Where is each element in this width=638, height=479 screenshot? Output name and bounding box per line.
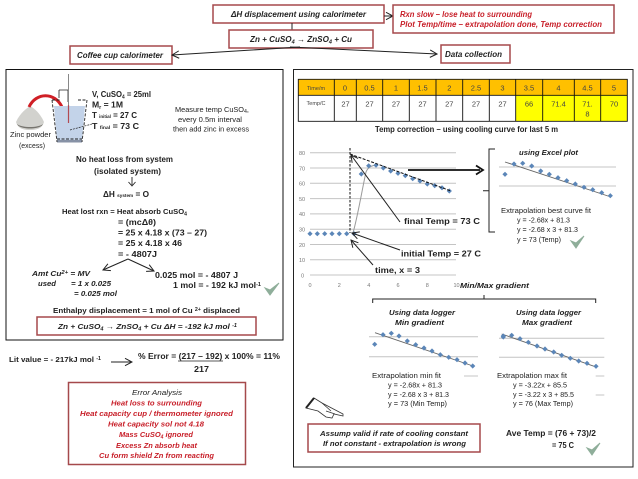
text: amount of copper: = 0.025 mol [74, 291, 118, 298]
text: amount of copper: = MV [68, 271, 92, 278]
chart: temperature vs time with cooling curve: 50 [299, 197, 305, 203]
text: quantities: r [99, 105, 101, 111]
heading: min gradient [389, 308, 456, 327]
table: time and temperature: 0.5 [364, 84, 375, 92]
table: time and temperature: 71.4 [551, 100, 566, 108]
table: time and temperature: 70 [610, 100, 618, 108]
chart: temperature vs time with cooling curve: 60 [299, 182, 305, 188]
arrow: initial temp [352, 233, 400, 250]
chart: temperature vs time with cooling curve: 0 [308, 283, 312, 289]
heading: max gradient: Max gradient [522, 318, 573, 327]
box: assumption [308, 424, 480, 452]
box: error analysis: Excess Zn absorb heat [116, 441, 197, 450]
text: heat calculation [62, 207, 207, 259]
chart: temperature vs time with cooling curve: 8 [426, 283, 429, 289]
text: heat calculation: = (mcΔθ) [118, 218, 156, 227]
text: amount of copper: = 1 x 0.025 [71, 281, 111, 288]
text: average temperature: Ave Temp = (76 + 73)/2 [506, 429, 597, 438]
text: measure temperature note: , [247, 107, 249, 114]
arrow: to data collection [290, 47, 437, 54]
table: time and temperature: 27 [498, 100, 507, 108]
text: Excel fit equations: y = -2.68 x 3 + 81.3 [517, 227, 578, 234]
box: enthalpy result: 4 [99, 326, 104, 332]
label: zinc powder [10, 132, 52, 150]
text: quantities: = 25ml [125, 90, 151, 99]
box: reaction equation: + Cu [332, 35, 352, 44]
text: amount of copper: Amt Cu [32, 271, 57, 278]
chart: max gradient fit [499, 334, 604, 395]
text: quantities: V, CuSO [92, 90, 123, 99]
box: error analysis: Error Analysis [132, 388, 182, 397]
text: heat calculation: Heat lost rxn = Heat absorb CuSO [62, 207, 182, 216]
label: zinc powder: (excess) [19, 143, 45, 150]
label: zinc powder: Zinc powder [10, 132, 52, 139]
text: heat calculation: = 25 x 4.18 x (73 – 27) [118, 228, 207, 238]
arrow: big arrow to Excel plot [408, 166, 483, 174]
text: average temperature: = 75 C [552, 441, 574, 450]
table: time and temperature: 4 [556, 84, 561, 92]
table: time and temperature [298, 79, 627, 121]
box: conditions [393, 5, 614, 33]
box: enthalpy result: Zn + CuSO [58, 322, 97, 331]
bracket: Excel plot [483, 149, 495, 232]
chart: min gradient fit [369, 333, 478, 376]
table: time and temperature: 8 [585, 110, 590, 118]
box: assumption: Assump valid if rate of cooling constant [319, 429, 469, 438]
box: enthalpy result [37, 317, 256, 335]
text: Excel fit equations: y = 73 (Temp) [517, 237, 561, 244]
icon: check mark [587, 443, 600, 455]
table: time and temperature: 27 [341, 100, 350, 108]
label: final temp: final Temp = 73 C [404, 217, 480, 226]
box: error analysis: Heat capacity cup / thermometer ignored [80, 409, 233, 418]
text: literature value: -1 [96, 356, 101, 362]
text: enthalpy definition: 2+ [195, 307, 201, 313]
text: enthalpy definition: Enthalpy displacement = 1 mol of Cu [53, 306, 184, 315]
chart: temperature vs time with cooling curve: 30 [299, 228, 305, 234]
icon: beaker with thermometer [52, 74, 92, 142]
box: reaction equation: Zn + CuSO [250, 35, 291, 44]
box: conditions: Plot Temp/time – extrapolation done, Temp correction [400, 20, 602, 29]
chart: temperature vs time with cooling curve: 10 [454, 283, 460, 289]
text: max fit equations [497, 373, 574, 408]
chart: temperature vs time with cooling curve: 2 [338, 283, 341, 289]
text: percent error [138, 352, 280, 374]
text: per mole enthalpy: 0.025 mol = - 4807 J [155, 271, 238, 280]
text: measure temperature note: every 0.5m interval [178, 117, 242, 124]
icon: zinc powder pile [16, 106, 44, 130]
chart: temperature vs time with cooling curve: 0 [301, 273, 304, 279]
text: measure temperature note: then add zinc in excess [173, 126, 250, 134]
box: enthalpy result: → ZnSO [103, 322, 138, 331]
text: percent error: 217 [194, 365, 210, 374]
arrow: time [351, 240, 373, 265]
text: quantities: 4 [122, 94, 125, 100]
text: measure temperature note: Measure temp CuSO [175, 107, 241, 114]
box: error analysis: 4 [160, 434, 164, 440]
text: per mole enthalpy [155, 271, 261, 290]
heading: min/max gradient: Min/Max gradient [460, 281, 530, 290]
table: time and temperature: 1 [394, 84, 398, 92]
text: enthalpy definition: displaced [201, 306, 240, 315]
text: min fit equations: y = -2.68 x 3 + 81.3 [388, 392, 449, 399]
text: max fit equations: Extrapolation max fit [497, 373, 567, 380]
text: literature value: Lit value = - 217kJ mol [9, 355, 89, 364]
icon: red arrow adding zinc [29, 96, 62, 107]
table: time and temperature: 71. [582, 100, 593, 108]
text: quantities: T initial = 27 C [92, 111, 137, 120]
text: min fit equations [372, 373, 449, 408]
text: quantities: T final = 73 C [92, 122, 139, 131]
chart: temperature vs time with cooling curve: 40 [299, 212, 305, 218]
heading: min gradient: Min gradient [395, 318, 445, 327]
text: heat calculation: = - 4807J [118, 250, 157, 259]
text: min fit equations: y = -2.68x + 81.3 [388, 382, 442, 390]
text: isolated system [76, 155, 173, 199]
table: time and temperature: 27 [472, 100, 480, 108]
text: max fit equations: y = -3.22x + 85.5 [513, 382, 567, 390]
table: time and temperature: 27 [418, 100, 427, 108]
box: enthalpy result: + Cu ΔH = -192 kJ mol [141, 322, 232, 331]
arrow: split right [128, 259, 154, 271]
heading: max gradient [516, 308, 582, 327]
bracket: min and max [373, 295, 596, 303]
panel: coffee cup calorimeter working [6, 70, 283, 340]
chart: temperature vs time with cooling curve: 20 [299, 243, 305, 249]
text: measure temperature note [173, 107, 250, 134]
text: min fit equations: Extrapolation min fit [372, 373, 441, 380]
box: error analysis: Heat capacity sol not 4.18 [108, 420, 205, 428]
arrow: to coffee cup [172, 47, 300, 55]
panel: data collection and temperature correction [294, 70, 633, 467]
text: isolated system: No heat loss from system [76, 155, 173, 164]
table: time and temperature: 5 [612, 84, 616, 92]
table: time and temperature: 27 [365, 100, 374, 108]
chart: Excel best fit [499, 162, 616, 197]
box: reaction equation: 4 [291, 40, 295, 46]
text: isolated system: (isolated system) [94, 167, 161, 176]
text: Excel fit equations: Extrapolation best curve fit [501, 208, 591, 215]
table: time and temperature: 27 [445, 100, 453, 108]
box: delta H displacement: ΔH displacement using calorimeter [230, 10, 367, 19]
arrow: to conditions box [384, 15, 393, 17]
arrow: final temp [351, 155, 400, 222]
text: amount of copper [31, 270, 118, 298]
box: enthalpy result: -1 [232, 323, 237, 329]
text: percent error: % Error = (217 – 192) x 100% = 11% [138, 352, 280, 361]
table: time and temperature: 2 [447, 84, 451, 92]
icon: pointing hand [306, 398, 343, 418]
box: error analysis: ignored [163, 430, 193, 439]
arrow: to reaction equation [291, 23, 293, 37]
text: quantities [92, 90, 151, 131]
chart: temperature vs time with cooling curve [299, 148, 460, 289]
heading: min gradient: Using data logger [389, 308, 456, 317]
text: max fit equations: y = 76 (Max Temp) [513, 401, 573, 408]
icon: check mark [571, 236, 584, 248]
text: measure temperature note: 4 [244, 109, 247, 115]
arrow: to percent error [111, 361, 132, 363]
text: isolated system: ΔH system = O [103, 190, 149, 199]
table: time and temperature: Temp/C [307, 101, 326, 107]
text: heat calculation: 4 [184, 212, 187, 218]
heading: temp correction: Temp correction – using cooling curve for last 5 m [375, 125, 558, 134]
text: per mole enthalpy: -1 [256, 282, 261, 288]
box: data collection: Data collection [445, 50, 502, 59]
table: time and temperature: 66 [525, 100, 533, 108]
box: reaction equation: 4 [328, 40, 332, 46]
table: time and temperature: Time/m [307, 86, 325, 92]
box: coffee cup calorimeter [70, 46, 172, 64]
text: max fit equations: y = -3.22 x 3 + 85.5 [513, 392, 574, 399]
heading: max gradient: Using data logger [516, 308, 582, 317]
label: time: time, x = 3 [375, 266, 421, 275]
text: Excel fit equations: y = -2.68x + 81.3 [517, 218, 570, 224]
box: data collection [441, 45, 510, 63]
text: average temperature [506, 429, 597, 450]
box: conditions: Rxn slow – lose heat to surrounding [400, 10, 532, 19]
chart: temperature vs time with cooling curve: 6 [396, 283, 400, 289]
table: time and temperature: 4.5 [582, 84, 593, 92]
box: error analysis: Cu form shield Zn from reacting [99, 451, 214, 460]
box: coffee cup calorimeter: Coffee cup calorimeter [77, 51, 164, 60]
text: quantities: M [92, 100, 99, 110]
chart: temperature vs time with cooling curve: 80 [299, 151, 305, 157]
table: time and temperature: 1.5 [417, 84, 428, 92]
arrow: split left [103, 259, 128, 270]
box: delta H displacement [213, 5, 384, 23]
heading: using Excel plot: using Excel plot [519, 148, 579, 157]
table: time and temperature: 2.5 [471, 84, 481, 92]
table: time and temperature: 3.5 [524, 84, 534, 92]
text: min fit equations: y = 73 (Min Temp) [388, 401, 447, 408]
box: error analysis [68, 382, 246, 464]
text: Excel fit equations [501, 208, 591, 244]
box: error analysis: Mass CuSO [119, 430, 161, 439]
chart: temperature vs time with cooling curve: 70 [299, 166, 305, 172]
chart: temperature vs time with cooling curve: 10 [299, 258, 305, 264]
text: amount of copper: used [38, 281, 57, 288]
chart: temperature vs time with cooling curve: 4 [367, 283, 370, 289]
icon: check mark [265, 283, 279, 295]
box: reaction equation [229, 30, 373, 48]
box: enthalpy result: 4 [137, 326, 142, 332]
box: reaction equation: → ZnSO [295, 35, 330, 44]
label: initial temp: initial Temp = 27 C [401, 250, 481, 258]
box: error analysis: Heat loss to surrounding [111, 398, 202, 408]
table: time and temperature: 27 [392, 100, 400, 108]
box: assumption: If not constant - extrapolation is wrong [323, 439, 466, 448]
text: per mole enthalpy: 1 mol = - 192 kJ mol [173, 281, 249, 290]
text: heat calculation: = 25 x 4.18 x 46 [118, 239, 183, 248]
table: time and temperature: 3 [500, 84, 505, 92]
table: time and temperature: 0 [343, 84, 347, 92]
text: amount of copper: 2+ [60, 270, 68, 276]
text: quantities: = 1M [101, 100, 123, 110]
